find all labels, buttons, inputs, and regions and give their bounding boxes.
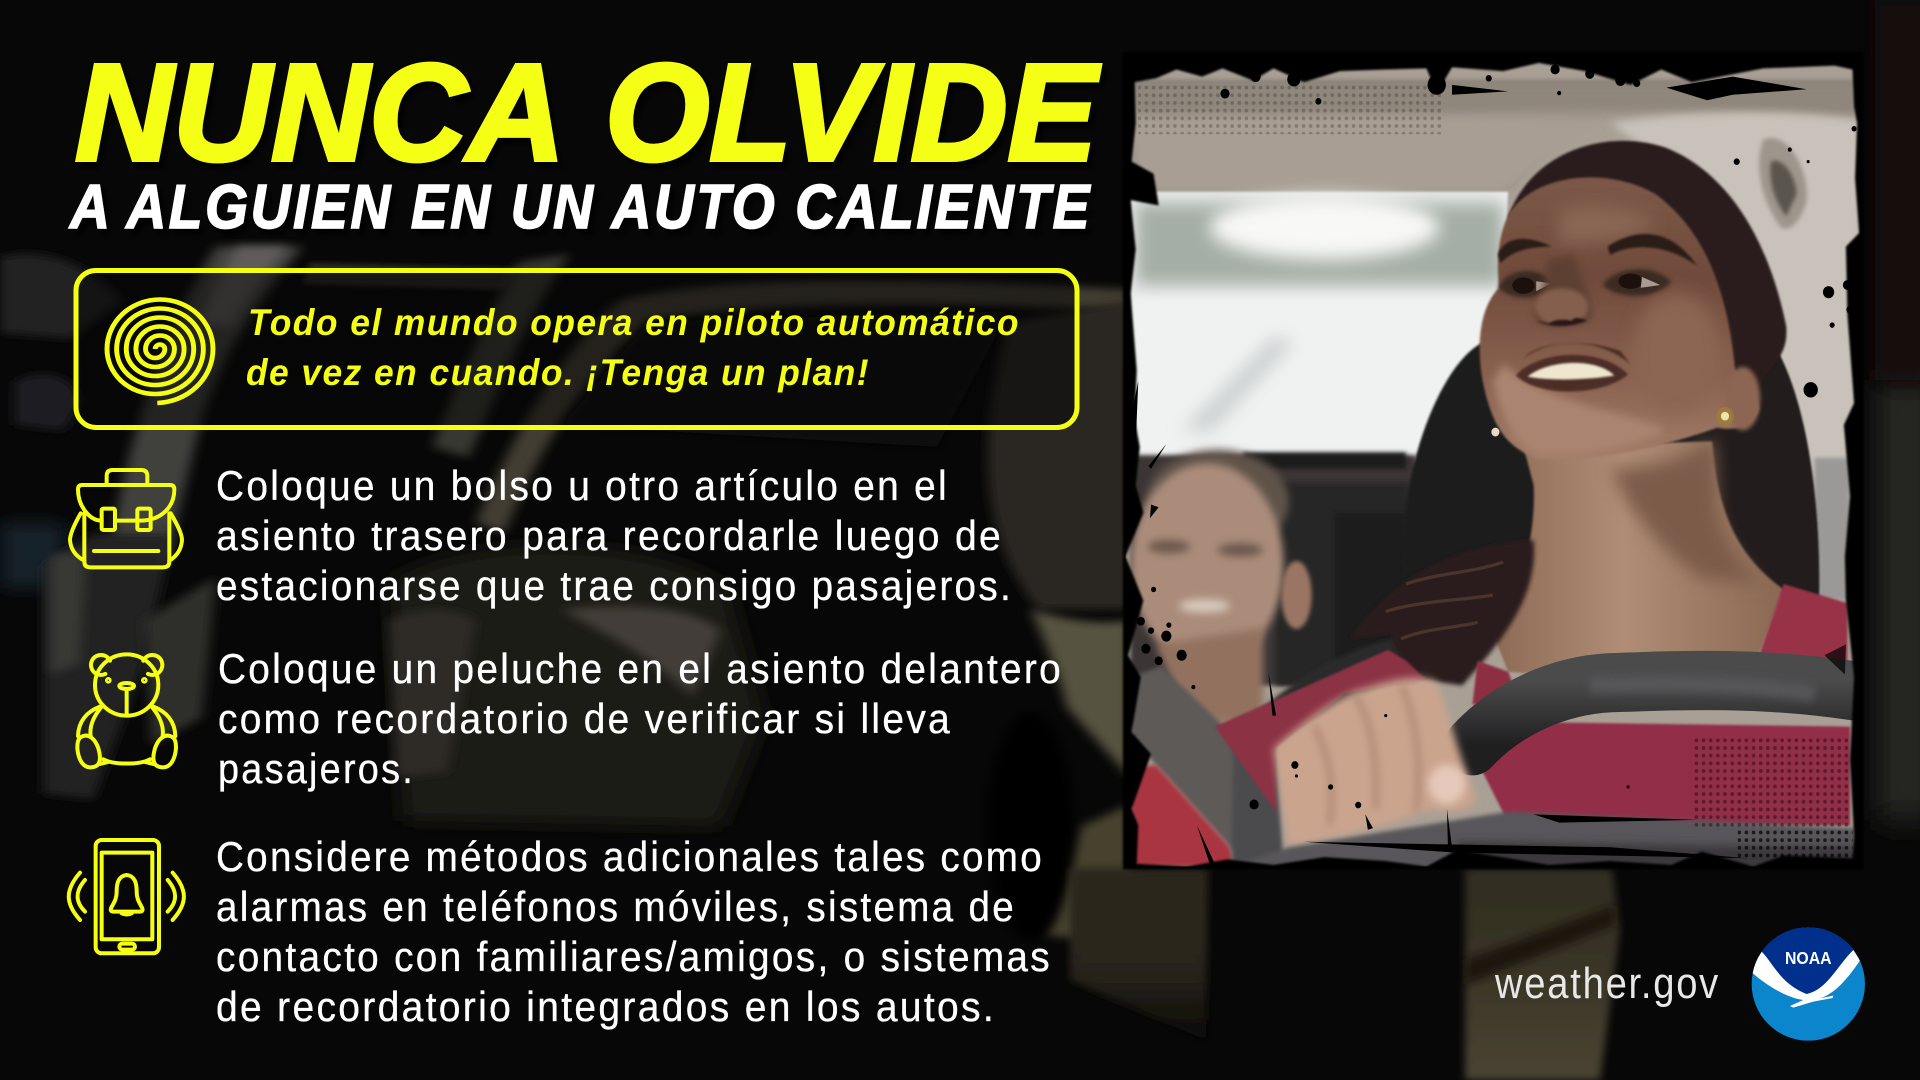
icon: phone with alarm bbox=[69, 840, 184, 953]
tip 3 text: de recordatorio integrados en los autos. bbox=[216, 983, 996, 1030]
tip 3 text: Considere métodos adicionales tales como bbox=[216, 833, 1044, 880]
callout box bbox=[76, 270, 1077, 428]
tip 1 text: Coloque un bolso u otro artículo en el bbox=[216, 462, 949, 509]
NOAA logo: NOAA bbox=[1785, 948, 1832, 968]
tip 2 text bbox=[218, 645, 1063, 792]
icon: teddy bear bbox=[77, 654, 176, 767]
photo panel: mother driving with child bbox=[1123, 52, 1864, 869]
callout text: de vez en cuando. ¡Tenga un plan! bbox=[246, 352, 870, 393]
tip 1 text bbox=[216, 462, 1013, 609]
title: NUNCA OLVIDE: OLVIDE bbox=[605, 36, 1101, 190]
tip 3 text bbox=[216, 833, 1052, 1030]
tip 1 text: asiento trasero para recordarle luego de bbox=[216, 512, 1003, 559]
icon: spiral bbox=[107, 300, 213, 403]
tip 1 text: estacionarse que trae consigo pasajeros. bbox=[216, 562, 1013, 609]
tip 3 text: contacto con familiares/amigos, o sistemas bbox=[216, 933, 1052, 980]
icon: school bag bbox=[70, 470, 182, 567]
distressed black frame bbox=[1123, 52, 1864, 869]
title: NUNCA OLVIDE: NUNCA bbox=[75, 36, 565, 190]
callout text bbox=[246, 302, 1020, 393]
tip 3 text: alarmas en teléfonos móviles, sistema de bbox=[216, 883, 1016, 930]
grunge specks bbox=[1132, 65, 1857, 864]
title: NUNCA OLVIDE bbox=[75, 36, 1101, 190]
NOAA logo bbox=[1752, 927, 1865, 1041]
callout text: Todo el mundo opera en piloto automático bbox=[248, 302, 1020, 343]
tip 2 text: como recordatorio de verificar si lleva bbox=[218, 695, 952, 742]
weather.gov label: weather.gov bbox=[1494, 959, 1720, 1008]
tip 2 text: Coloque un peluche en el asiento delantero bbox=[218, 645, 1063, 692]
subtitle: A ALGUIEN EN UN AUTO CALIENTE bbox=[68, 173, 1092, 242]
halftone texture bbox=[1138, 85, 1853, 861]
tip 2 text: pasajeros. bbox=[218, 745, 415, 792]
